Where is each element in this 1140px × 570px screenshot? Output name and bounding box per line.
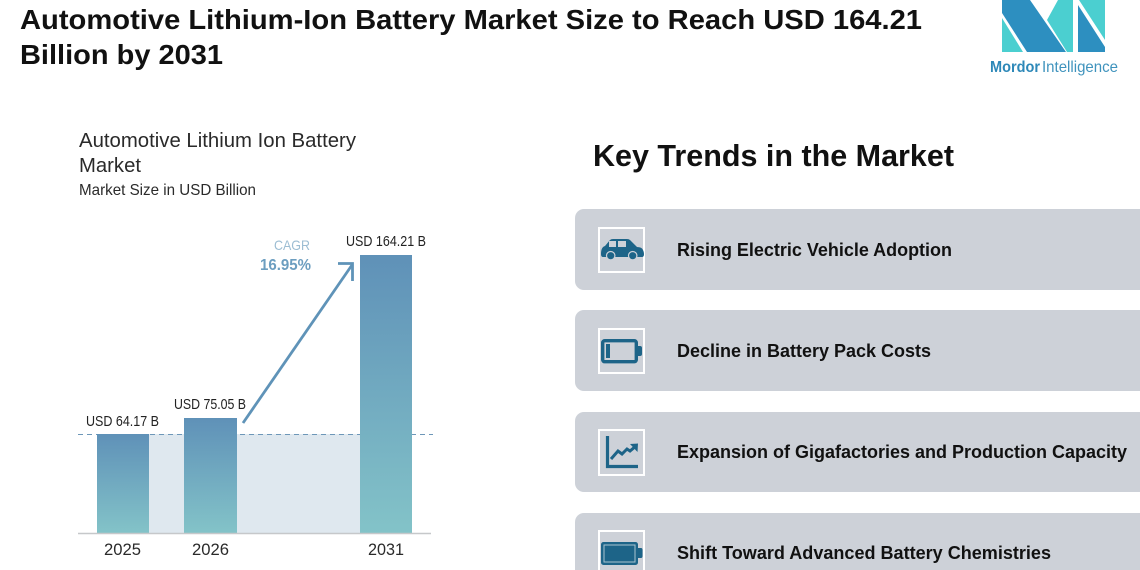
value label: 2031: USD 164.21 B bbox=[346, 233, 426, 250]
card text: Rising Electric Vehicle Adoption bbox=[677, 240, 952, 260]
bar: 2031 bbox=[360, 255, 412, 533]
card text: Decline in Battery Pack Costs bbox=[677, 341, 931, 361]
value label: 2025: USD 64.17 B bbox=[86, 413, 159, 430]
value label: 2026: USD 75.05 B bbox=[174, 396, 246, 413]
chart heading: Market bbox=[79, 155, 141, 177]
title: Automotive Lithium-Ion Battery Market Size to Reach USD 164.21 bbox=[20, 4, 922, 35]
year labels: 2031 bbox=[368, 540, 404, 559]
panel: advanced chemistries bbox=[575, 513, 1140, 570]
year labels: 2025 bbox=[104, 540, 141, 559]
chart heading: Automotive Lithium Ion Battery bbox=[79, 130, 356, 152]
logo: Mordor Intelligence: Intelligence bbox=[1042, 59, 1118, 76]
year labels: 2026 bbox=[192, 540, 229, 559]
CAGR callout bbox=[260, 237, 311, 274]
logo: Mordor Intelligence bbox=[990, 0, 1118, 76]
panel: rising EV adoption bbox=[575, 209, 1140, 290]
title bbox=[20, 4, 922, 70]
heading: key trends: Key Trends in the Market bbox=[593, 138, 954, 173]
title: Billion by 2031 bbox=[20, 39, 223, 70]
panel: battery pack costs bbox=[575, 310, 1140, 391]
CAGR callout: 16.95% bbox=[260, 257, 311, 274]
panel: gigafactories bbox=[575, 412, 1140, 492]
icon: full battery bbox=[599, 531, 644, 570]
icon: car bbox=[599, 228, 644, 272]
arrow: CAGR growth bbox=[243, 264, 352, 423]
bar: 2025 bbox=[97, 434, 149, 533]
card text: Expansion of Gigafactories and Production Capacity bbox=[677, 442, 1127, 462]
CAGR callout: CAGR bbox=[274, 237, 310, 253]
bar chart bbox=[78, 233, 433, 559]
chart heading bbox=[79, 130, 356, 199]
card text: Shift Toward Advanced Battery Chemistries bbox=[677, 543, 1051, 563]
icon: low battery bbox=[599, 329, 644, 373]
icon: growth chart bbox=[599, 430, 644, 475]
year labels bbox=[104, 540, 404, 559]
bar: 2026 bbox=[184, 418, 237, 533]
logo: Mordor Intelligence: Mordor bbox=[990, 59, 1040, 76]
chart heading: Market Size in USD Billion bbox=[79, 182, 256, 199]
